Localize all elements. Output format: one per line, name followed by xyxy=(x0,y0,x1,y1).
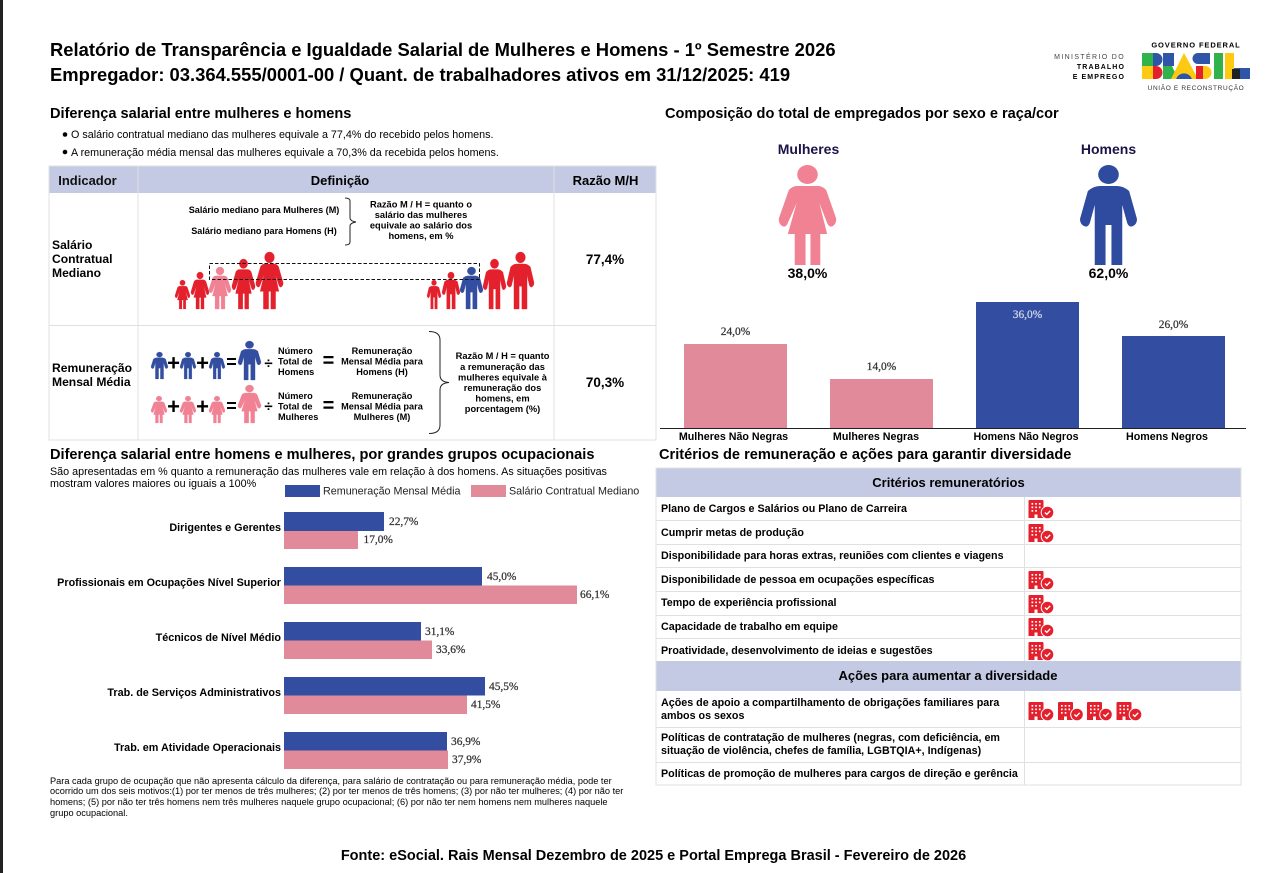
legend: Remuneração Mensal Média xyxy=(323,486,460,498)
row labels: critérios: Capacidade de trabalho em equipe xyxy=(661,621,838,633)
bar: mulheres não negras: Mulheres Não Negras xyxy=(679,431,788,443)
definition: salário mediano: Razão M / H = quanto o xyxy=(370,200,472,210)
bar: homens não negros: Homens Não Negros xyxy=(973,431,1079,443)
row label: remuneração mensal média: Mensal Média xyxy=(52,375,131,389)
bar chart: composição xyxy=(660,302,1246,443)
logo: Ministério do Trabalho e Emprego xyxy=(1054,52,1125,81)
text block: rodapé do gráfico: homens; (5) por não ter três homens nem três mulheres naquele grupo ocupacional; (6) por não ter nem homens nem mulheres naquele xyxy=(50,797,608,807)
group: atividade operacional xyxy=(114,732,482,769)
formula: remuneração média mulheres: ÷ xyxy=(264,398,273,415)
bar chart: grupos ocupacionais xyxy=(57,512,610,769)
logo: Governo Federal Brasil xyxy=(1142,40,1250,92)
bar: mulheres negras: Mulheres Negras xyxy=(833,431,919,443)
bar: mulheres não negras: 24,0% xyxy=(721,326,751,338)
figure: homens 62%: Homens xyxy=(1081,141,1136,157)
formula: remuneração média mulheres: + xyxy=(196,394,209,419)
figure: homens 62%: 62,0% xyxy=(1089,265,1129,281)
header: indicador: Indicador xyxy=(58,173,117,188)
value: 77,4%: 77,4% xyxy=(586,252,624,267)
row label: salário contratual mediano: Contratual xyxy=(52,252,112,266)
logo: Governo Federal Brasil: GOVERNO FEDERAL xyxy=(1151,40,1241,50)
logo: Ministério do Trabalho e Emprego: MINISTÉRIO DO xyxy=(1054,52,1125,61)
legend: Salário Contratual Mediano xyxy=(509,486,639,498)
header: razão: Razão M/H xyxy=(573,173,638,188)
formula: remuneração média homens: + xyxy=(196,350,209,376)
text block: rodapé do gráfico: Para cada grupo de ocupação que não apresenta cálculo da diferença, para salário de contratação ou para remuneração média, pode ter xyxy=(50,776,612,786)
heading: diferença salarial: Diferença salarial entre mulheres e homens xyxy=(50,106,351,122)
row label: salário contratual mediano: Salário xyxy=(52,238,92,252)
row labels: ações: Políticas de contratação de mulheres (negras, com deficiência, em xyxy=(661,732,1000,744)
row labels: critérios: Cumprir metas de produção xyxy=(661,527,804,539)
formula: remuneração média homens: Homens xyxy=(278,367,314,377)
definition: salário mediano: salário das mulheres xyxy=(375,210,467,220)
text block: nota do gráfico: São apresentadas em % quanto a remuneração das mulheres vale em relação à dos homens. As situações positivas xyxy=(50,466,607,478)
bar: mulheres não negras xyxy=(679,326,788,443)
heading: critérios: Critérios de remuneração e ações para garantir diversidade xyxy=(659,447,1071,463)
row labels: critérios: Disponibilidade de pessoa em ocupações específicas xyxy=(661,574,934,586)
text block: resumo xyxy=(63,129,499,159)
definition: razão remuneração: a remuneração das xyxy=(460,362,545,372)
left page edge xyxy=(0,0,3,873)
legend xyxy=(285,485,639,498)
group: serviços administrativos: Trab. de Serviços Administrativos xyxy=(107,687,281,699)
row labels: critérios: Disponibilidade para horas extras, reuniões com clientes e viagens xyxy=(661,550,1004,562)
group: profissionais: 45,0% xyxy=(487,571,517,583)
row labels: critérios: Proatividade, desenvolvimento de ideias e sugestões xyxy=(661,645,933,657)
group: dirigentes e gerentes: 22,7% xyxy=(389,516,419,528)
group: atividade operacional: 37,9% xyxy=(452,754,482,766)
panel: tabela de indicadores xyxy=(49,166,656,440)
row labels: critérios xyxy=(661,503,1004,657)
formula: remuneração média homens: = xyxy=(226,352,237,372)
definition: razão remuneração: porcentagem (%) xyxy=(465,404,540,414)
source footer: Fonte: eSocial. Rais Mensal Dezembro de 2025 e Portal Emprega Brasil - Fevereiro de 2026 xyxy=(341,848,966,864)
group: dirigentes e gerentes: 17,0% xyxy=(364,534,393,546)
row labels: ações: ambos os sexos xyxy=(661,710,744,722)
header: ações: Ações para aumentar a diversidade xyxy=(839,668,1057,683)
formula: remuneração média homens: = xyxy=(323,350,334,372)
definition: razão remuneração: mulheres equivale à xyxy=(458,372,548,382)
group: profissionais: 66,1% xyxy=(580,589,610,601)
title: Relatório de Transparência e Igualdade Salarial de Mulheres e Homens - 1º Semestre 2026 xyxy=(50,39,836,60)
text block: rodapé do gráfico: grupo ocupacional. xyxy=(50,808,128,818)
definition: salário mediano: Salário mediano para Mulheres (M) xyxy=(189,205,339,215)
formula: remuneração média mulheres xyxy=(151,385,424,423)
group: atividade operacional: Trab. em Atividade Operacionais xyxy=(114,742,281,754)
group: técnicos: 33,6% xyxy=(436,644,466,656)
formula: remuneração média mulheres: Mulheres (M) xyxy=(354,412,410,422)
formula: remuneração média mulheres: Total de xyxy=(278,402,313,412)
icons: ações xyxy=(1028,702,1142,721)
formula: remuneração média mulheres: Mulheres xyxy=(278,412,318,422)
logo: Ministério do Trabalho e Emprego: E EMPREGO xyxy=(1073,74,1125,81)
header: definição: Definição xyxy=(311,173,369,188)
header: critérios remuneratórios: Critérios remuneratórios xyxy=(872,475,1025,490)
logo: Governo Federal Brasil: UNIÃO E RECONSTRUÇÃO xyxy=(1148,83,1244,92)
group: serviços administrativos: 45,5% xyxy=(489,681,519,693)
formula: remuneração média homens: ÷ xyxy=(264,355,273,372)
group: serviços administrativos xyxy=(107,677,519,714)
logo: Ministério do Trabalho e Emprego: TRABALHO xyxy=(1077,64,1125,71)
group: atividade operacional: 36,9% xyxy=(451,736,481,748)
definition: salário mediano: homens, em % xyxy=(388,231,454,241)
formula: remuneração média homens: Remuneração xyxy=(352,346,413,356)
heading: composição: Composição do total de empregados por sexo e raça/cor xyxy=(665,106,1059,122)
definition: salário mediano xyxy=(189,198,472,245)
figure: mulheres 38% xyxy=(778,141,839,281)
text block: nota do gráfico xyxy=(50,466,607,490)
group: dirigentes e gerentes xyxy=(169,512,419,549)
text block: rodapé do gráfico xyxy=(50,776,623,818)
bar: homens não negros xyxy=(973,302,1079,443)
bar: mulheres negras: 14,0% xyxy=(867,361,897,373)
row labels: ações: Políticas de promoção de mulheres para cargos de direção e gerência xyxy=(661,768,1019,780)
group: profissionais: Profissionais em Ocupações Nível Superior xyxy=(57,577,282,589)
text block: rodapé do gráfico: ocorrido um dos seis motivos:(1) por ter menos de três mulheres; (2) por ter menos de três homens; (3) por não ter mulheres; (4) por não ter xyxy=(50,786,623,796)
icon: pessoas, mediana xyxy=(175,252,534,309)
formula: remuneração média mulheres: Número xyxy=(278,391,313,401)
group: serviços administrativos: 41,5% xyxy=(471,699,501,711)
group: dirigentes e gerentes: Dirigentes e Gerentes xyxy=(169,522,281,534)
bar: homens negros xyxy=(1122,319,1225,443)
formula: remuneração média homens xyxy=(151,341,424,380)
row label: salário contratual mediano: Mediano xyxy=(52,266,101,280)
row label: remuneração mensal média: Remuneração xyxy=(52,361,132,375)
row labels: critérios: Plano de Cargos e Salários ou Plano de Carreira xyxy=(661,503,908,515)
text block: resumo: A remuneração média mensal das mulheres equivale a 70,3% da recebida pelos homens. xyxy=(71,147,499,159)
figure: mulheres 38%: Mulheres xyxy=(778,141,839,157)
row labels: ações: situação de violência, chefes de família, LGBTQIA+, Indígenas) xyxy=(661,745,982,757)
text block: resumo: O salário contratual mediano das mulheres equivale a 77,4% do recebido pelos homens. xyxy=(71,129,494,141)
value: 70,3%: 70,3% xyxy=(586,375,624,390)
text block: nota do gráfico: mostram valores maiores ou iguais a 100% xyxy=(50,478,257,490)
group: profissionais xyxy=(57,567,610,604)
row labels: ações xyxy=(661,697,1019,780)
definition: razão remuneração xyxy=(429,332,550,434)
group: técnicos: Técnicos de Nível Médio xyxy=(156,632,281,644)
bar: homens negros: Homens Negros xyxy=(1126,431,1208,443)
formula: remuneração média homens: Homens (H) xyxy=(356,367,408,377)
definition: razão remuneração: homens, em xyxy=(475,394,530,404)
bar: mulheres negras xyxy=(830,361,933,443)
formula: remuneração média mulheres: + xyxy=(167,394,180,419)
formula: remuneração média homens: Mensal Média para xyxy=(341,356,424,366)
formula: remuneração média homens: Número xyxy=(278,346,313,356)
bar: homens negros: 26,0% xyxy=(1159,319,1189,331)
definition: salário mediano: equivale ao salário dos xyxy=(370,220,472,230)
definition: razão remuneração: remuneração dos xyxy=(464,383,541,393)
formula: remuneração média mulheres: = xyxy=(226,396,237,416)
definition: salário mediano: Salário mediano para Homens (H) xyxy=(191,226,337,236)
bar: homens não negros: 36,0% xyxy=(1013,309,1043,321)
figure: mulheres 38%: 38,0% xyxy=(788,265,828,281)
row labels: critérios: Tempo de experiência profissional xyxy=(661,597,837,609)
heading: grupos ocupacionais: Diferença salarial entre homens e mulheres, por grandes grupos ocupacionais xyxy=(50,447,594,463)
formula: remuneração média mulheres: Remuneração xyxy=(352,391,413,401)
row labels: ações: Ações de apoio a compartilhamento de obrigações familiares para xyxy=(661,697,1000,709)
formula: remuneração média homens: Total de xyxy=(278,356,313,366)
formula: remuneração média homens: + xyxy=(167,350,180,376)
icons: critérios atendidos xyxy=(1028,500,1054,661)
title: Empregador: 03.364.555/0001-00 / Quant. de trabalhadores ativos em 31/12/2025: 419 xyxy=(50,64,790,85)
panel: tabela de critérios xyxy=(656,468,1241,785)
row label: remuneração mensal média xyxy=(52,361,132,389)
row label: salário contratual mediano xyxy=(52,238,112,280)
figure: homens 62% xyxy=(1080,141,1137,281)
formula: remuneração média mulheres: = xyxy=(323,395,334,417)
definition: razão remuneração: Razão M / H = quanto xyxy=(456,351,550,361)
group: técnicos: 31,1% xyxy=(425,626,455,638)
formula: remuneração média mulheres: Mensal Média para xyxy=(341,402,424,412)
group: técnicos xyxy=(156,622,466,659)
title xyxy=(50,39,836,85)
